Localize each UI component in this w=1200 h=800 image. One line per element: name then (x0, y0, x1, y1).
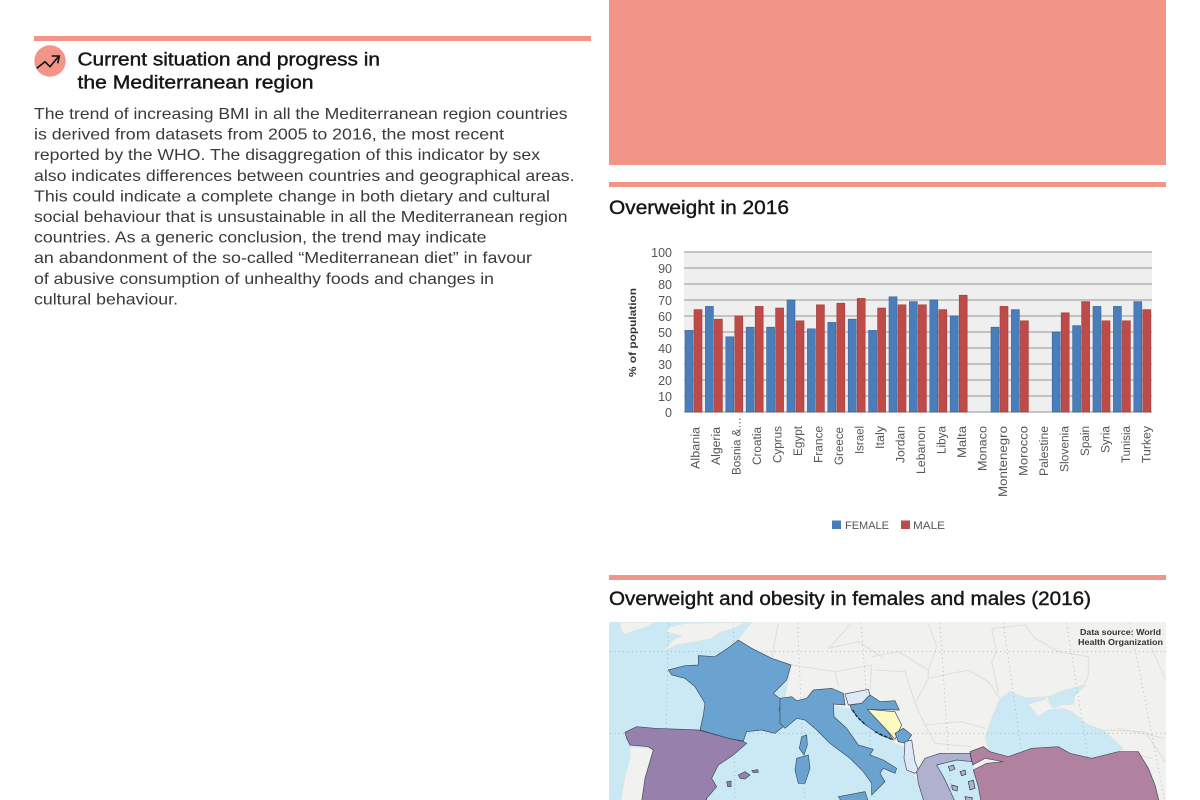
country labels: Malta (957, 425, 969, 458)
country labels: Turkey (1141, 426, 1153, 463)
y axis labels (651, 246, 672, 420)
country labels: Montenegro (998, 426, 1010, 497)
eastern Balkans and Turkey (895, 728, 1160, 800)
Montenegro (895, 728, 912, 743)
continental land (730, 620, 1200, 800)
Sicily (838, 792, 868, 800)
heading (78, 50, 380, 92)
country labels: Monaco (977, 426, 989, 471)
panel: overweight in 2016 (609, 182, 1166, 532)
y axis labels: 80 (658, 278, 672, 292)
y axis labels: 90 (658, 262, 672, 276)
y axis labels: 20 (658, 374, 672, 388)
Bosnia and Herzegovina (867, 709, 902, 739)
section rule (34, 36, 591, 41)
Aegean Sea (937, 760, 982, 800)
Italy (780, 688, 897, 795)
country labels: Jordan (895, 426, 907, 463)
country labels: Cyprus (772, 426, 784, 463)
country labels: Albania (690, 426, 702, 469)
y axis labels: 10 (658, 390, 672, 404)
panel: current situation (34, 36, 591, 308)
country labels (690, 417, 1153, 497)
country labels: Morocco (1018, 426, 1030, 476)
Slovenia (845, 689, 870, 705)
heading: Overweight in 2016 (609, 198, 789, 219)
female bars (685, 297, 1142, 412)
Dalmatian islands (853, 710, 892, 739)
panel: salmon colour block (609, 0, 1166, 165)
Greece (917, 753, 972, 800)
section rule (609, 182, 1166, 187)
heading: Overweight and obesity in females and males (2016) (609, 589, 1091, 610)
y axis labels: 40 (658, 342, 672, 356)
body text: of abusive consumption of unhealthy foods and changes in (34, 271, 494, 288)
male bars (694, 295, 1151, 412)
body text: social behaviour that is unsustainable in all the Mediterranean region (34, 209, 568, 226)
country labels: France (813, 426, 825, 463)
y axis labels: 60 (658, 310, 672, 324)
France (668, 640, 791, 741)
heading: Current situation and progress in (78, 50, 380, 70)
body text: The trend of increasing BMI in all the Mediterranean region countries (34, 106, 568, 123)
country labels: Algeria (711, 426, 723, 465)
western land: British Isles and Portugal (620, 622, 745, 800)
data source note: Health Organization (1078, 638, 1163, 647)
bar chart (627, 246, 1153, 532)
Turkey (970, 747, 1160, 800)
Black Sea (985, 692, 1123, 758)
body text: cultural behaviour. (34, 291, 178, 308)
y axis labels: 100 (651, 246, 672, 260)
Spain (625, 727, 747, 800)
legend: FEMALE (845, 520, 889, 532)
heading: the Mediterranean region (78, 72, 314, 92)
country labels: Spain (1080, 426, 1092, 456)
graticule (610, 623, 1172, 800)
body text: This could indicate a complete change in both dietary and cultural (34, 188, 550, 205)
choropleth map (609, 620, 1200, 800)
legend: MALE (913, 520, 945, 532)
country labels: Syria (1100, 425, 1112, 453)
country labels: Libya (936, 425, 948, 454)
country labels: Tunisia (1121, 425, 1133, 463)
country labels: Greece (834, 427, 846, 465)
Albania (904, 740, 918, 773)
data source note: Data source: World (1080, 628, 1161, 637)
y axis labels: 0 (665, 406, 672, 420)
y axis labels: 50 (658, 326, 672, 340)
data source note (1078, 628, 1163, 647)
country labels: Croatia (752, 426, 764, 465)
country labels: Egypt (793, 425, 805, 456)
plot background (684, 252, 1152, 412)
section rule (609, 575, 1166, 580)
Aegean islands (948, 765, 975, 800)
border lines of unreported countries (772, 623, 1165, 762)
body text: an abandonment of the so-called “Mediterranean diet” in favour (34, 250, 533, 267)
country labels: Bosnia &… (732, 417, 744, 475)
body text: is derived from datasets from 2005 to 2016, the most recent (34, 127, 505, 144)
body text: reported by the WHO. The disaggregation of this indicator by sex (34, 147, 540, 164)
country labels: Slovenia (1059, 425, 1071, 472)
Italy and the western Balkans (780, 688, 902, 800)
Croatia (850, 695, 899, 740)
legend (832, 520, 945, 532)
Balearic Islands (727, 770, 758, 787)
Sea of Azov (1048, 684, 1087, 708)
body text: countries. As a generic conclusion, the trend may indicate (34, 230, 487, 247)
icon: rising trend arrow (34, 45, 66, 77)
country labels: Italy (875, 426, 887, 449)
country labels: Lebanon (916, 426, 928, 474)
country labels: Palestine (1039, 426, 1051, 476)
y axis title: % of population (627, 288, 639, 377)
Iberia and France (625, 640, 791, 800)
y axis labels: 30 (658, 358, 672, 372)
panel: overweight and obesity map (609, 575, 1200, 800)
Corsica and Sardinia (795, 735, 810, 783)
body text: also indicates differences between countries and geographical areas. (34, 168, 574, 185)
y axis labels: 70 (658, 294, 672, 308)
sea (609, 622, 1166, 800)
country labels: Israel (854, 426, 866, 454)
body text (34, 106, 574, 308)
